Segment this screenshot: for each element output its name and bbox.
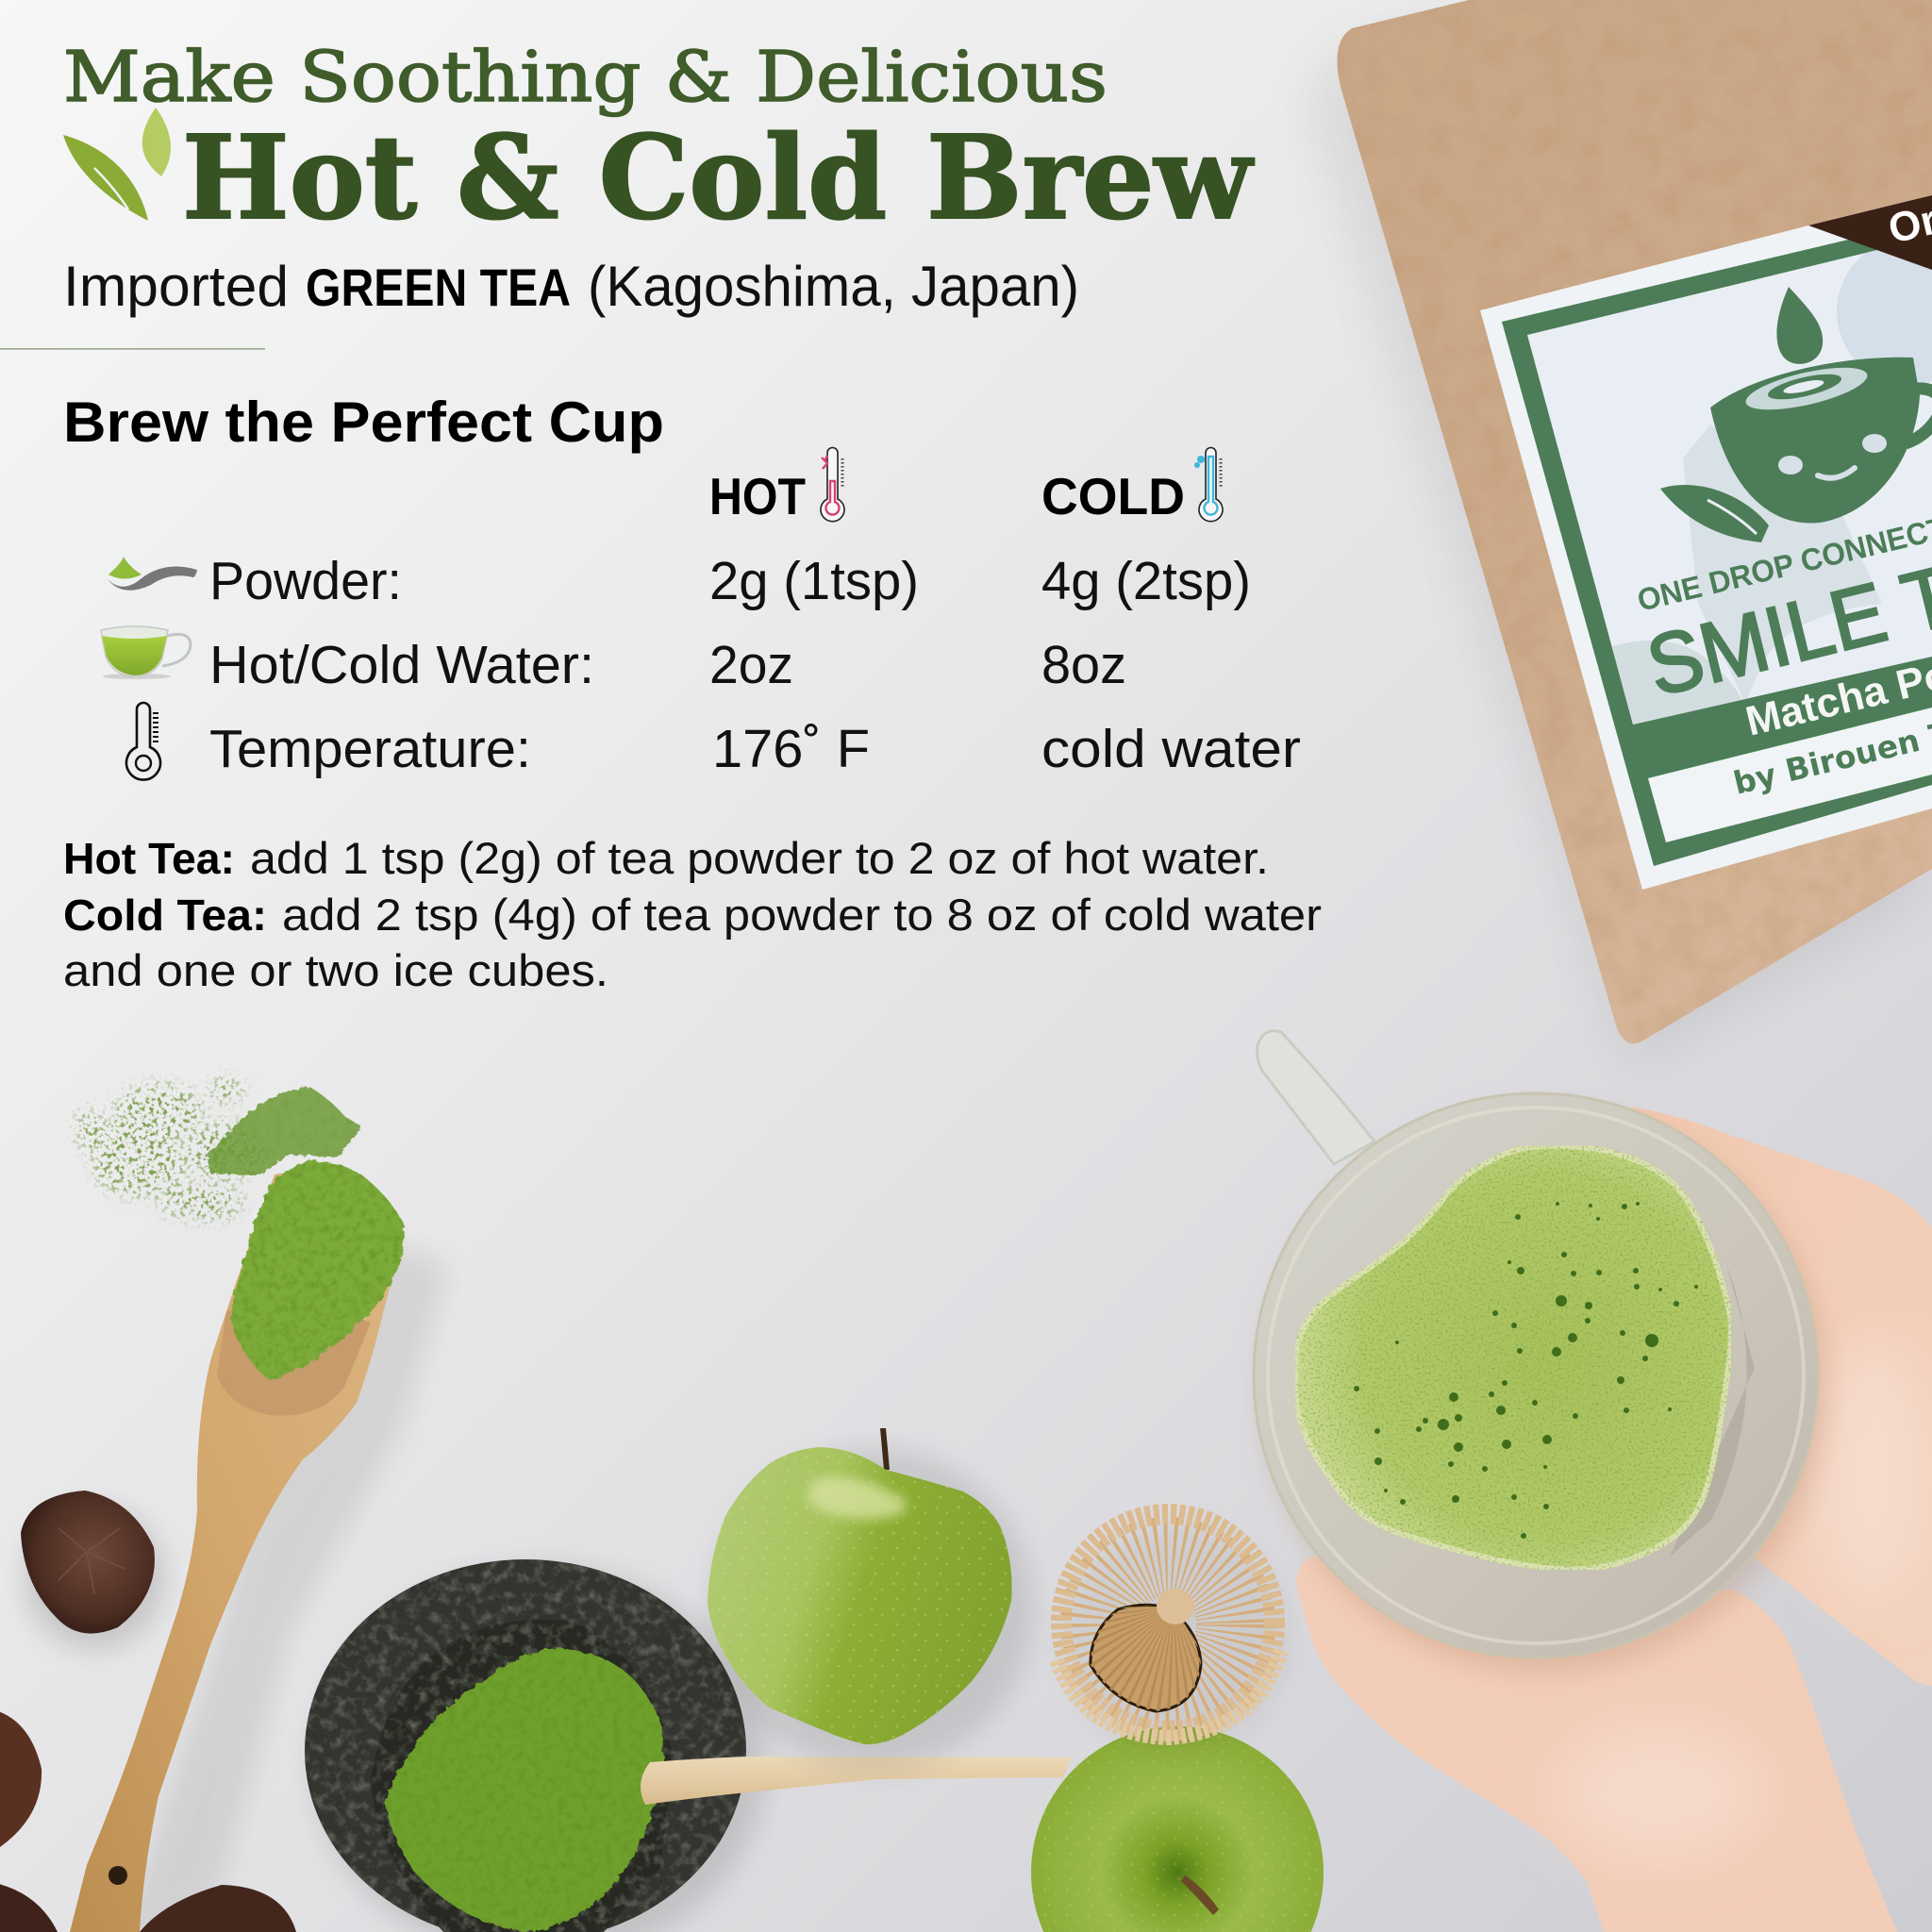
subtitle: GREEN TEA — [306, 258, 571, 317]
row: temperature: cold water — [1041, 719, 1301, 779]
lower hand and wrist — [1296, 1557, 1897, 1932]
column header: hot — [709, 447, 844, 525]
chasen bamboo whisk — [1057, 1514, 1288, 1750]
logo: smiling cup with drop and leaf — [1660, 287, 1932, 542]
upper right hand — [1604, 1107, 1932, 1686]
product bag: kraft pouch with label — [1309, 0, 1932, 1067]
title: line one: Make Soothing & Delicious — [63, 37, 1108, 118]
scattered matcha powder — [75, 1078, 361, 1220]
matcha surface — [1295, 1145, 1731, 1570]
icon: powder spoon — [108, 557, 197, 591]
spoon hole — [108, 1866, 127, 1885]
instructions text: Hot Tea: — [63, 834, 235, 883]
subtitle: (Kagoshima, Japan) — [588, 255, 1079, 318]
bag label dark corner band — [1808, 195, 1932, 270]
title leaves — [63, 108, 171, 221]
row: powder: Powder: — [209, 551, 402, 611]
instructions text — [63, 833, 1322, 995]
row: powder: 4g (2tsp) — [1041, 551, 1251, 611]
row: water: 8oz — [1041, 635, 1126, 695]
column header: cold — [1041, 447, 1223, 525]
divider line — [0, 348, 265, 350]
matcha bubbles — [1354, 1202, 1698, 1539]
instructions text: Cold Tea: — [63, 891, 267, 940]
green apple lower — [1031, 1726, 1324, 1932]
row: powder — [108, 551, 1251, 611]
instructions text: add 1 tsp (2g) of tea powder to 2 oz of hot water. — [250, 833, 1269, 883]
shadow of glass on hands — [1260, 1106, 1826, 1672]
column header: hot: HOT — [709, 467, 806, 525]
glass handle — [1257, 1031, 1374, 1164]
row: temperature: 176˚ F — [712, 719, 870, 779]
instructions text: add 2 tsp (4g) of tea powder to 8 oz of cold water — [282, 890, 1322, 940]
row: water: Hot/Cold Water: — [209, 635, 594, 695]
matcha powder on spoon — [231, 1160, 405, 1380]
heading: brew the perfect cup: Brew the Perfect Cup — [63, 391, 664, 454]
icon: thermometer — [126, 703, 160, 780]
subtitle — [63, 255, 1079, 318]
wooden spoon with matcha — [70, 1160, 449, 1932]
subtitle: Imported — [63, 255, 289, 318]
chestnuts — [0, 1491, 296, 1932]
row: powder: 2g (1tsp) — [709, 551, 919, 611]
row: water: 2oz — [709, 635, 793, 695]
row: water — [101, 626, 1126, 695]
column header: cold: COLD — [1041, 467, 1185, 525]
matcha powder in mortar — [385, 1648, 664, 1932]
hands holding glass — [1260, 1106, 1932, 1932]
brew table — [101, 447, 1301, 780]
instructions text: and one or two ice cubes. — [63, 945, 608, 995]
glass cup with matcha — [1254, 1031, 1818, 1657]
title: line two: Hot & Cold Brew — [182, 109, 1255, 245]
bamboo tea scoop — [641, 1757, 1072, 1805]
stone mortar with matcha — [305, 1559, 766, 1932]
green apple upper — [708, 1428, 1033, 1769]
icon: green tea cup — [101, 626, 191, 679]
row: temperature: Temperature: — [209, 719, 531, 779]
row: temperature — [126, 703, 1301, 780]
